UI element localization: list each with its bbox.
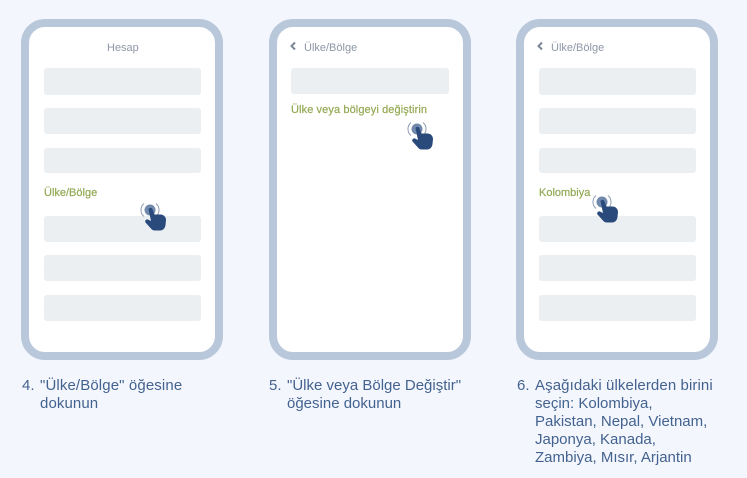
caption: step 6 xyxy=(517,377,713,466)
screen title: Ülke/Bölge xyxy=(551,42,604,54)
list row 1 xyxy=(44,68,201,95)
list row xyxy=(291,68,449,94)
list row 6 xyxy=(44,295,201,321)
screen title: Hesap xyxy=(107,42,139,54)
caption: step 6: Zambiya, Mısır, Arjantin xyxy=(535,449,692,466)
back chevron xyxy=(290,42,296,50)
caption: step 5 xyxy=(269,377,461,412)
list row 5 xyxy=(539,255,696,281)
list row 4 xyxy=(44,216,201,242)
caption: step 5: 5. xyxy=(269,377,282,394)
icon: tapping hand xyxy=(140,203,166,230)
caption: step 6: Japonya, Kanada, xyxy=(535,431,656,448)
list row 5 xyxy=(44,255,201,281)
caption: step 6: 6. xyxy=(517,377,530,394)
list row 2 xyxy=(539,108,696,134)
caption: step 6: Aşağıdaki ülkelerden birini xyxy=(535,377,713,394)
caption: step 4: dokunun xyxy=(40,395,98,412)
list row 4 xyxy=(539,216,696,242)
list row 3 xyxy=(44,148,201,173)
icon: tapping hand xyxy=(408,122,433,150)
icon: tapping hand xyxy=(592,195,618,222)
caption: step 6: seçin: Kolombiya, xyxy=(535,395,653,412)
caption: step 5: öğesine dokunun xyxy=(287,395,401,412)
caption: step 4 xyxy=(22,377,182,412)
caption: step 5: "Ülke veya Bölge Değiştir" xyxy=(287,377,461,394)
highlighted item: Ülke veya bölgeyi değiştirin xyxy=(291,104,427,116)
list row 2 xyxy=(44,108,201,134)
panel: step 5 phone xyxy=(269,19,471,360)
list row 3 xyxy=(539,148,696,173)
back chevron xyxy=(537,42,543,50)
highlighted item: Ülke/Bölge xyxy=(44,187,97,199)
caption: step 4: 4. xyxy=(22,377,35,394)
list row 1 xyxy=(539,68,696,95)
screen title: Ülke/Bölge xyxy=(304,42,357,54)
panel: step 6 phone xyxy=(516,19,718,360)
panel: step 4 phone xyxy=(21,19,223,360)
highlighted item: Kolombiya xyxy=(539,187,590,199)
caption: step 4: "Ülke/Bölge" öğesine xyxy=(40,377,182,394)
caption: step 6: Pakistan, Nepal, Vietnam, xyxy=(535,413,707,430)
list row 6 xyxy=(539,295,696,321)
